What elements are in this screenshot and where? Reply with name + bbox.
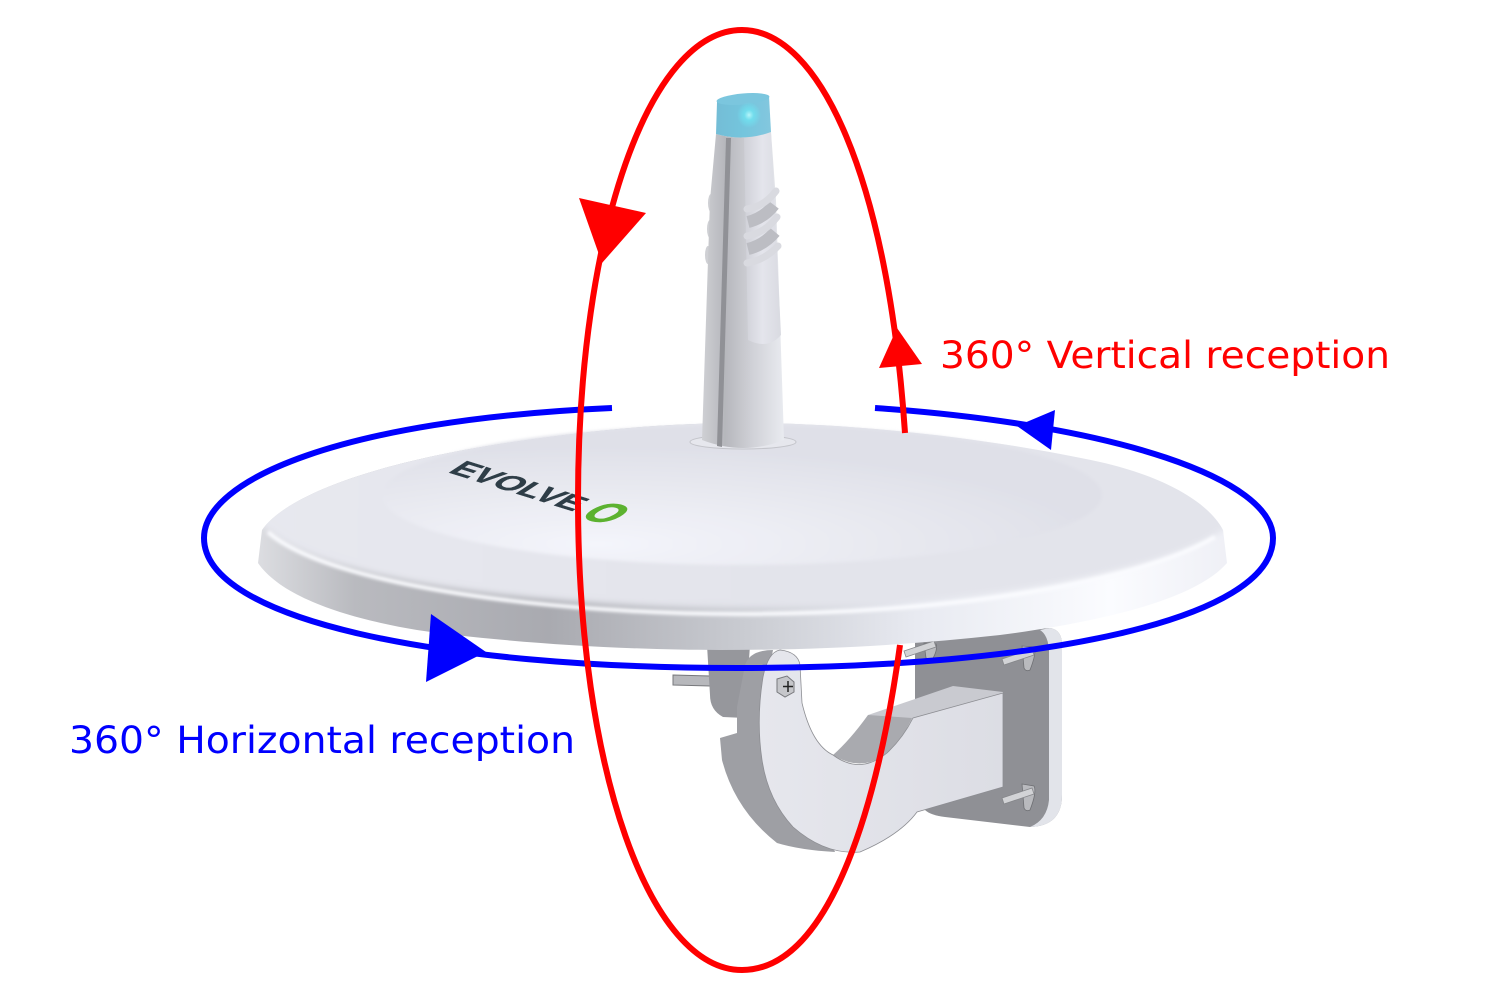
dish raised centre xyxy=(382,425,1102,565)
red arrow right xyxy=(879,328,922,368)
cap glow xyxy=(737,102,761,128)
rim highlight xyxy=(268,532,1215,614)
arm top xyxy=(868,686,1003,725)
blue arrow back xyxy=(1017,410,1055,450)
mast seam xyxy=(717,138,731,447)
antenna mast xyxy=(690,91,796,449)
rib bumps xyxy=(705,194,714,264)
red arrow left xyxy=(579,198,646,263)
wall plate xyxy=(915,628,1062,827)
plate edge highlight xyxy=(1030,628,1062,827)
arm inner curve xyxy=(833,715,912,764)
logo xyxy=(441,457,643,530)
hook and arm front xyxy=(759,650,1003,852)
dish rim xyxy=(258,423,1227,650)
label: vertical reception: 360° Vertical reception xyxy=(940,333,1390,377)
dish top surface xyxy=(264,424,1222,618)
plate screws xyxy=(904,641,1035,811)
blue arrow front xyxy=(426,614,486,682)
hook bolt xyxy=(777,676,794,697)
mast body xyxy=(702,132,784,448)
label: horizontal reception: 360° Horizontal reception xyxy=(69,718,575,762)
hook shadow side xyxy=(720,650,835,852)
red vertical ring xyxy=(578,30,922,970)
logo: O xyxy=(569,497,643,530)
blue horizontal ring xyxy=(204,408,1273,682)
mast ribs xyxy=(747,191,778,263)
wall bracket xyxy=(673,628,1062,852)
rear screw xyxy=(673,675,710,686)
mast cap xyxy=(716,95,771,138)
cap top xyxy=(716,91,770,107)
mast inset panel xyxy=(744,132,781,344)
dish xyxy=(258,424,1227,650)
mast base xyxy=(690,435,796,449)
logo: EVOLVE xyxy=(441,457,596,515)
rear hinge block xyxy=(707,645,750,718)
